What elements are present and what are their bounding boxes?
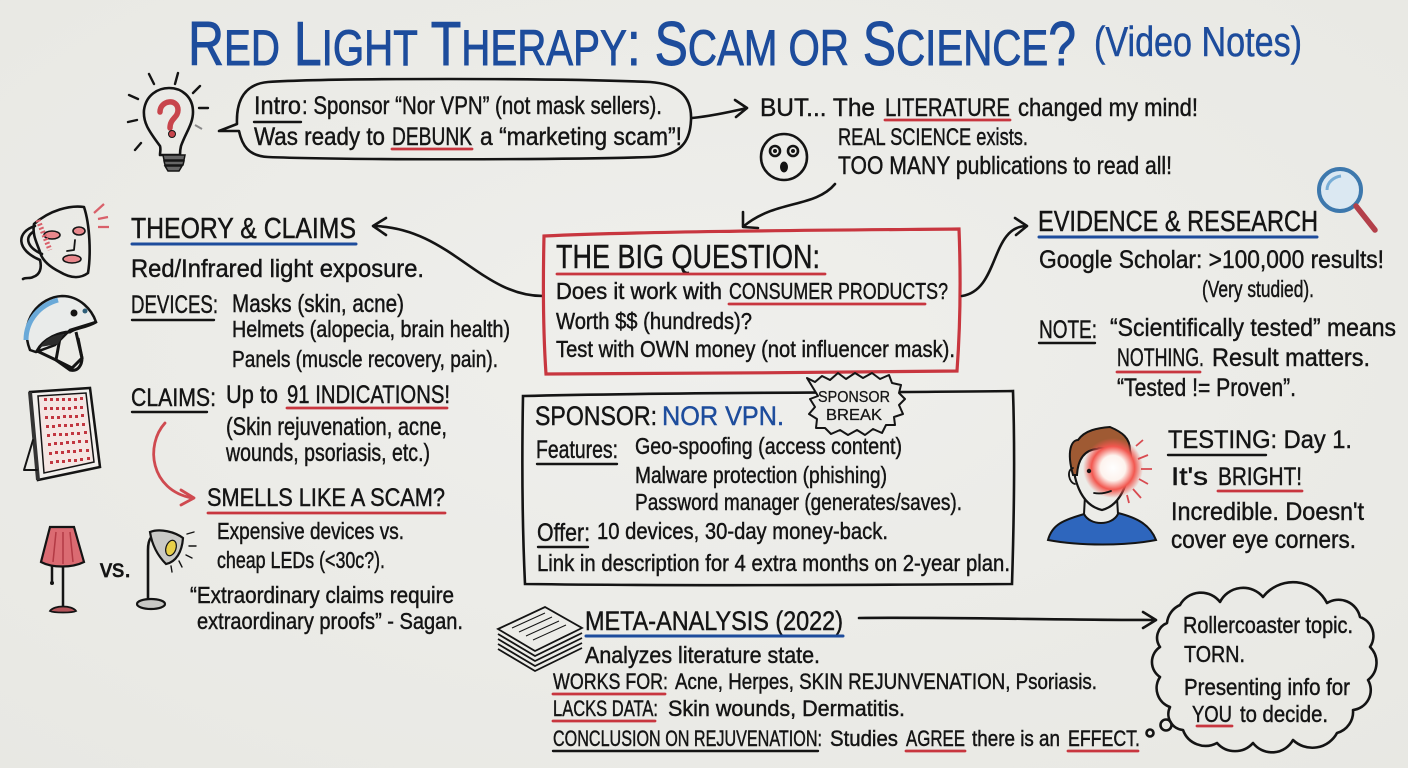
text: but the literature: BUT... The bbox=[760, 94, 875, 122]
panel: theory and claims: wounds, psoriasis, etc.) bbox=[225, 439, 430, 467]
icon: surprised face bbox=[761, 134, 807, 180]
panel: theory and claims bbox=[131, 213, 510, 467]
arrow: meta-analysis to thought bubble bbox=[859, 612, 1156, 628]
intro speech bubble: a “marketing scam”! bbox=[480, 123, 682, 151]
panel: theory and claims: Up to bbox=[226, 381, 278, 409]
panel: meta-analysis: WORKS FOR: bbox=[553, 669, 668, 694]
panel: meta-analysis: EFFECT. bbox=[1068, 726, 1140, 751]
panel: theory and claims: Panels (muscle recovery, pain). bbox=[232, 346, 498, 372]
panel: evidence and research: Result matters. bbox=[1212, 344, 1370, 372]
panel: evidence and research: NOTHING. bbox=[1117, 344, 1204, 372]
icon: light bulb with question mark bbox=[128, 73, 208, 171]
panel: meta-analysis: Studies bbox=[830, 726, 898, 751]
panel: meta-analysis: LACKS DATA: bbox=[553, 696, 658, 721]
thought bubble: TORN. bbox=[1184, 641, 1245, 667]
panel: the big question: Does it work with bbox=[556, 278, 722, 304]
text: but the literature: REAL SCIENCE exists. bbox=[838, 124, 1028, 151]
panel: testing bbox=[1168, 426, 1364, 554]
badge: sponsor break bbox=[807, 373, 905, 435]
panel: the big question: CONSUMER PRODUCTS? bbox=[729, 278, 948, 304]
panel: meta-analysis bbox=[553, 606, 1140, 751]
intro speech bubble: Was ready to bbox=[254, 123, 385, 151]
panel: sponsor: Offer: bbox=[537, 519, 590, 547]
icon: desk lamp bbox=[137, 530, 196, 609]
text: vs.: vs. bbox=[100, 555, 131, 583]
heading: sponsor nor vpn: SPONSOR: bbox=[535, 401, 657, 431]
icon: red lamp bbox=[41, 527, 84, 612]
panel: sponsor: Malware protection (phishing) bbox=[635, 462, 887, 488]
panel: meta-analysis: CONCLUSION ON REJUVENATION: bbox=[553, 726, 822, 751]
panel: smells like a scam: extraordinary proofs” - Sagan. bbox=[197, 608, 463, 634]
panel: theory and claims: (Skin rejuvenation, acne, bbox=[226, 413, 447, 441]
text: but the literature bbox=[760, 94, 1198, 180]
panel: sponsor: Password manager (generates/saves). bbox=[635, 489, 962, 515]
text: but the literature: LITERATURE bbox=[885, 94, 1010, 122]
title: (Video Notes) bbox=[1094, 18, 1302, 65]
thought bubble: YOU bbox=[1192, 701, 1232, 727]
intro speech bubble bbox=[219, 79, 691, 159]
panel: theory and claims: Red/Infrared light exposure. bbox=[131, 255, 424, 283]
arrow: big question to evidence bbox=[962, 218, 1027, 296]
panel: sponsor: Features: bbox=[536, 436, 618, 464]
panel: evidence and research: “Tested != Proven”. bbox=[1117, 374, 1296, 402]
panel: evidence and research bbox=[1038, 206, 1396, 402]
icon: person with bright eye bbox=[1048, 427, 1156, 544]
icon: paper stack bbox=[498, 607, 582, 671]
thought bubble: to decide. bbox=[1240, 701, 1328, 727]
panel: smells like a scam: “Extraordinary claims require bbox=[190, 582, 454, 608]
panel: smells like a scam: cheap LEDs (<30c?). bbox=[217, 547, 385, 573]
panel: theory and claims: DEVICES: bbox=[131, 291, 218, 319]
panel: smells like a scam: SMELLS LIKE A SCAM? bbox=[207, 484, 445, 512]
arrow: intro to but bbox=[692, 100, 747, 118]
thought bubble: Presenting info for bbox=[1184, 674, 1350, 700]
panel: the big question bbox=[543, 229, 960, 374]
panel: sponsor: 10 devices, 30-day money-back. bbox=[597, 518, 888, 544]
panel: testing: Incredible. Doesn't bbox=[1171, 498, 1364, 526]
panel: evidence and research: (Very studied). bbox=[1202, 276, 1314, 302]
arrow: to big question bbox=[743, 184, 835, 228]
panel: smells like a scam: Expensive devices vs. bbox=[217, 518, 404, 544]
heading: theory and claims: THEORY & CLAIMS bbox=[131, 213, 356, 245]
badge: sponsor break: SPONSOR bbox=[818, 389, 890, 406]
intro speech bubble: DEBUNK bbox=[392, 123, 472, 151]
intro speech bubble: Intro bbox=[254, 92, 301, 120]
title: RED LIGHT THERAPY: SCAM OR SCIENCE? bbox=[188, 10, 1076, 79]
arrow: big question to theory bbox=[373, 218, 543, 296]
panel: testing: cover eye corners. bbox=[1171, 526, 1356, 554]
panel: theory and claims: Masks (skin, acne) bbox=[232, 290, 404, 318]
heading: the big question: THE BIG QUESTION: bbox=[556, 238, 820, 275]
panel: theory and claims: CLAIMS: bbox=[131, 384, 216, 412]
heading: sponsor nor vpn bbox=[535, 401, 784, 431]
badge: sponsor break: BREAK bbox=[826, 407, 882, 424]
thought bubble bbox=[1146, 582, 1377, 752]
icon: LED panel bbox=[24, 388, 100, 480]
panel: sponsor: Geo-spoofing (access content) bbox=[635, 433, 902, 459]
heading: evidence and research: EVIDENCE & RESEARCH bbox=[1038, 206, 1318, 238]
panel: the big question: Test with OWN money (not influencer mask). bbox=[556, 336, 955, 362]
thought bubble: Rollercoaster topic. bbox=[1183, 612, 1353, 638]
panel: meta-analysis: Skin wounds, Dermatitis. bbox=[668, 696, 905, 721]
heading: sponsor nor vpn: NOR VPN. bbox=[662, 401, 784, 431]
panel: theory and claims: Helmets (alopecia, brain health) bbox=[232, 316, 510, 342]
panel: smells like a scam bbox=[190, 484, 463, 634]
panel: evidence and research: Google Scholar: >100,000 results! bbox=[1039, 246, 1384, 274]
icon: LED mask bbox=[21, 204, 109, 279]
panel: theory and claims: 91 INDICATIONS! bbox=[287, 381, 450, 409]
icon: helmet bbox=[26, 296, 96, 370]
panel: testing: BRIGHT! bbox=[1218, 463, 1302, 491]
text: but the literature: changed my mind! bbox=[1018, 94, 1198, 122]
intro speech bubble: : Sponsor “Nor VPN” (not mask sellers). bbox=[302, 92, 662, 120]
panel: sponsor: Link in description for 4 extra months on 2-year plan. bbox=[537, 550, 1010, 576]
panel: meta-analysis: Analyzes literature state. bbox=[585, 642, 820, 668]
panel: sponsor bbox=[522, 391, 1014, 585]
panel: meta-analysis: Acne, Herpes, SKIN REJUNVENATION, Psoriasis. bbox=[675, 669, 1097, 694]
icon: magnifying glass bbox=[1319, 169, 1375, 230]
text: but the literature: TOO MANY publications to read all! bbox=[838, 152, 1172, 180]
panel: the big question: Worth $$ (hundreds)? bbox=[556, 308, 752, 334]
heading: meta-analysis: META-ANALYSIS (2022) bbox=[585, 606, 843, 636]
panel: testing: It's bbox=[1171, 463, 1208, 491]
panel: testing: TESTING: Day 1. bbox=[1168, 426, 1352, 454]
panel: meta-analysis: AGREE bbox=[906, 726, 965, 751]
arrow: claims to scam bbox=[154, 423, 194, 505]
panel: evidence and research: NOTE: bbox=[1039, 316, 1097, 344]
panel: meta-analysis: there is an bbox=[972, 726, 1060, 751]
